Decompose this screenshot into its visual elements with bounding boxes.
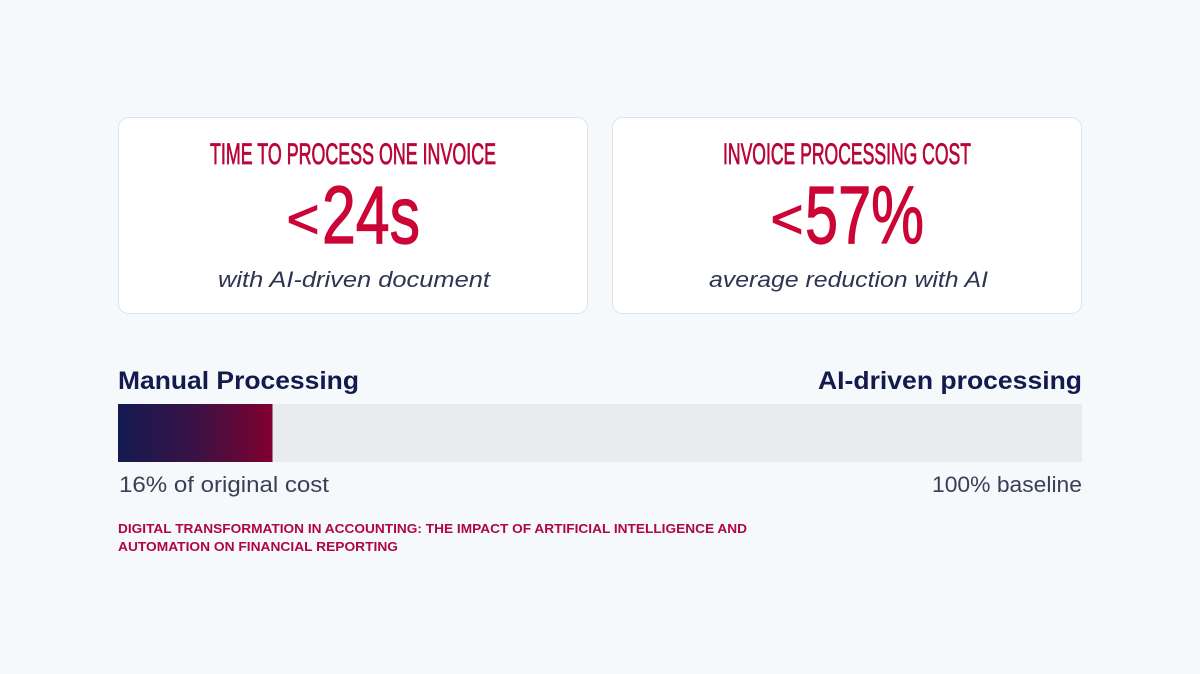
source citation [118,521,747,554]
stat: under 57 percent [770,170,924,261]
label: 100% baseline: 100% baseline [932,472,1082,497]
heading: time to process one invoice: TIME TO PROCESS ONE INVOICE [210,138,496,171]
source citation: DIGITAL TRANSFORMATION IN ACCOUNTING: THE IMPACT OF ARTIFICIAL INTELLIGENCE AND [118,521,747,536]
stat: under 24 seconds: < [286,187,320,250]
source citation: AUTOMATION ON FINANCIAL REPORTING [118,539,398,554]
caption: average reduction with AI: average reduction with AI [709,267,988,292]
label: manual processing: Manual Processing [118,367,359,395]
panel: time to process one invoice [118,118,588,314]
caption: with AI-driven document: with AI-driven document [218,267,492,292]
label: AI-driven processing: AI-driven processing [818,367,1082,395]
stat: under 24 seconds: 24s [322,170,420,261]
bar chart: cost comparison [118,404,1082,462]
heading: invoice processing cost: INVOICE PROCESSING COST [723,138,971,171]
bar fill: 16 percent [118,404,272,462]
stat: under 24 seconds [286,170,420,261]
stat: under 57 percent: < [770,187,804,250]
stat: under 57 percent: 57% [805,170,924,261]
label: 16% of original cost: 16% of original cost [119,472,329,497]
panel: invoice processing cost [612,118,1082,314]
